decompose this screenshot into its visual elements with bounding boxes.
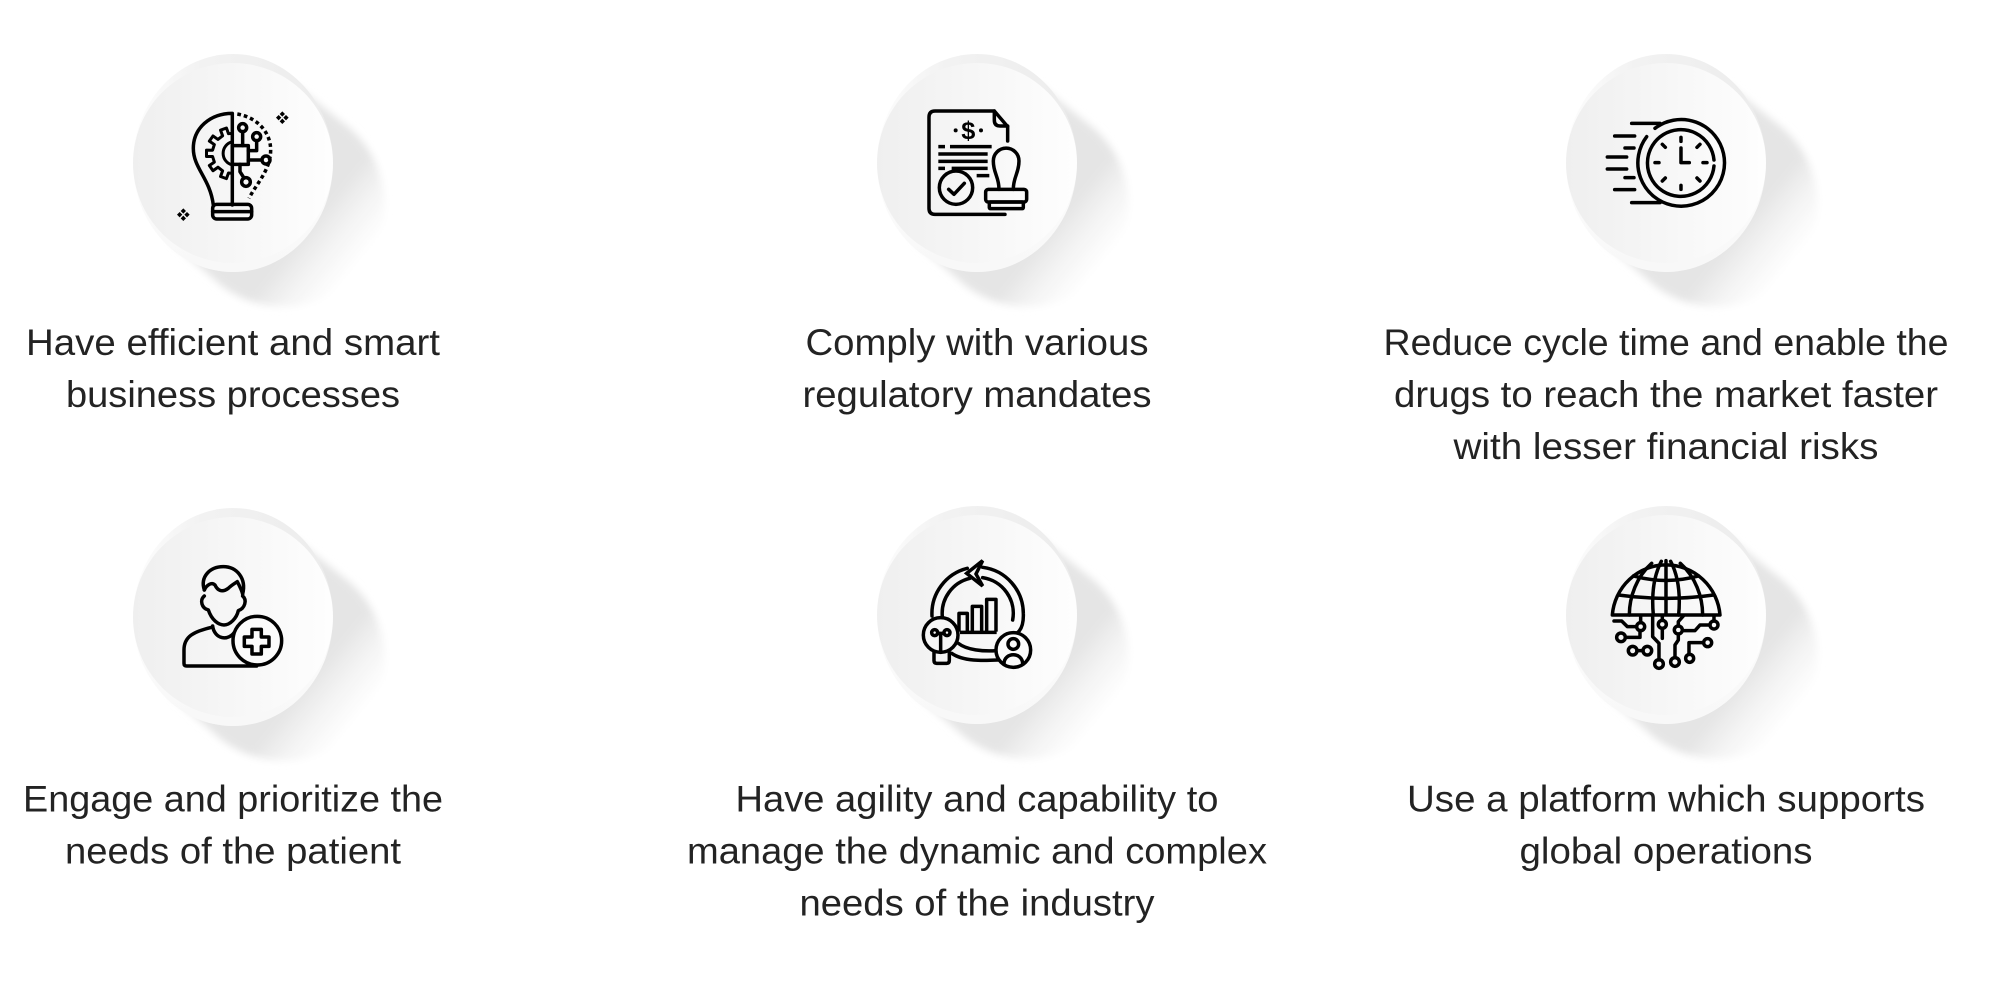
panel: engage the patient bbox=[23, 508, 443, 872]
caption 5: Have agility and capability to bbox=[736, 778, 1218, 820]
panel: reduce cycle time bbox=[1384, 54, 1948, 467]
panel: efficient business processes bbox=[26, 54, 441, 415]
caption 2: Comply with various bbox=[806, 321, 1148, 363]
icon: patient with plus bbox=[184, 567, 282, 666]
caption 1 bbox=[26, 321, 441, 415]
caption 6: Use a platform which supports bbox=[1407, 778, 1925, 820]
icon: fast clock bbox=[1607, 120, 1725, 206]
caption 5: manage the dynamic and complex bbox=[687, 830, 1267, 872]
caption 4: needs of the patient bbox=[65, 830, 402, 872]
disc 4 bbox=[133, 508, 385, 760]
caption 3: drugs to reach the market faster bbox=[1394, 373, 1938, 415]
disc 2 bbox=[877, 54, 1129, 306]
icon: document with stamp bbox=[929, 111, 1027, 214]
caption 5: needs of the industry bbox=[800, 882, 1155, 924]
caption 4 bbox=[23, 778, 443, 872]
caption 2 bbox=[802, 321, 1152, 415]
disc 6 bbox=[1566, 506, 1818, 758]
caption 6: global operations bbox=[1520, 830, 1812, 872]
disc 1 bbox=[133, 54, 385, 306]
caption 3: with lesser financial risks bbox=[1452, 425, 1878, 467]
panel: global platform bbox=[1407, 506, 1925, 872]
caption 2: regulatory mandates bbox=[802, 373, 1152, 415]
dollar sign: $ bbox=[961, 117, 975, 145]
disc 3 bbox=[1566, 54, 1818, 306]
caption 3: Reduce cycle time and enable the bbox=[1384, 321, 1948, 363]
panel: agility and capability bbox=[687, 506, 1267, 924]
caption 6 bbox=[1407, 778, 1925, 872]
icon: circuit globe bbox=[1612, 561, 1720, 668]
caption 1: business processes bbox=[66, 373, 400, 415]
caption 3 bbox=[1384, 321, 1948, 467]
caption 1: Have efficient and smart bbox=[26, 321, 441, 363]
icon: lightbulb with gear and circuit bbox=[177, 111, 289, 221]
disc 5 bbox=[877, 506, 1129, 758]
caption 5 bbox=[687, 778, 1267, 924]
icon: cycle with chart, bulb and person bbox=[923, 561, 1031, 667]
caption 4: Engage and prioritize the bbox=[23, 778, 443, 820]
panel: regulatory mandates bbox=[802, 54, 1152, 415]
